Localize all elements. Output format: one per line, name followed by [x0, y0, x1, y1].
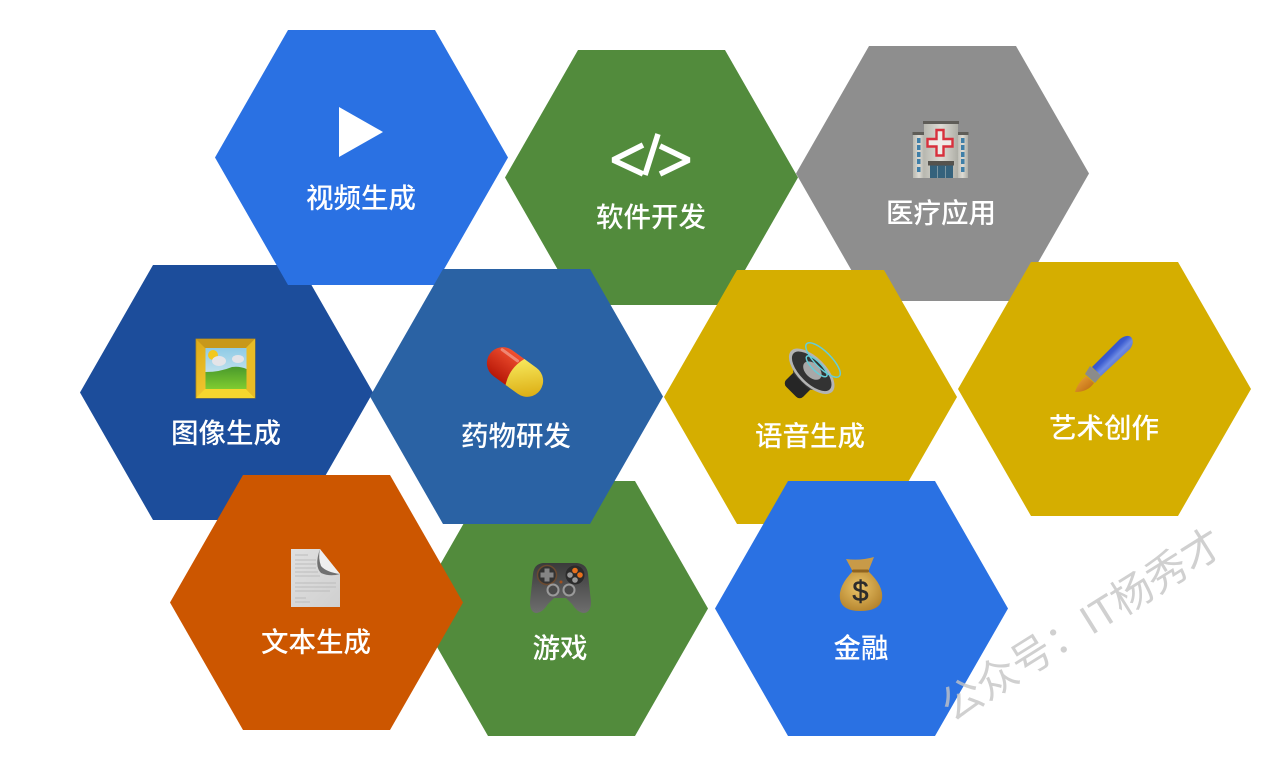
label: 文本生成 — [261, 626, 371, 658]
label: 语音生成 — [755, 420, 865, 452]
icon: code brackets — [613, 134, 689, 175]
watermark: 公众号：IT杨秀才 — [933, 520, 1231, 730]
hexagon: 药物研发 — [370, 269, 663, 524]
label: 游戏 — [532, 632, 588, 664]
icon: paintbrush — [1075, 336, 1133, 392]
hexagon: 艺术创作 — [958, 262, 1251, 516]
hexagon: 金融 — [715, 481, 1008, 736]
hexagon: 医疗应用 — [796, 46, 1089, 301]
icon: picture frame — [196, 339, 255, 398]
icon: pill capsule — [481, 341, 549, 403]
icon: document page — [291, 549, 340, 607]
hexagon: 游戏 — [415, 481, 708, 736]
icon: money bag: $ — [852, 576, 869, 608]
hexagon: 视频生成 — [215, 30, 508, 285]
icon: money bag — [840, 557, 882, 611]
label: 图像生成 — [171, 418, 281, 448]
hexagon: 语音生成 — [664, 270, 957, 524]
icon: play triangle — [339, 107, 383, 157]
icon: speaker — [771, 334, 849, 412]
hexagon: 软件开发 — [505, 50, 798, 305]
hexagon: 文本生成 — [170, 475, 463, 730]
label: 艺术创作 — [1049, 412, 1159, 444]
label: 视频生成 — [306, 182, 416, 214]
label: 金融 — [834, 632, 888, 664]
label: 医疗应用 — [886, 198, 996, 228]
label: 药物研发 — [461, 420, 571, 452]
icon: game controller — [530, 563, 591, 613]
hexagon: 图像生成 — [80, 265, 373, 520]
label: 软件开发 — [596, 202, 706, 232]
icon: hospital — [912, 121, 968, 178]
